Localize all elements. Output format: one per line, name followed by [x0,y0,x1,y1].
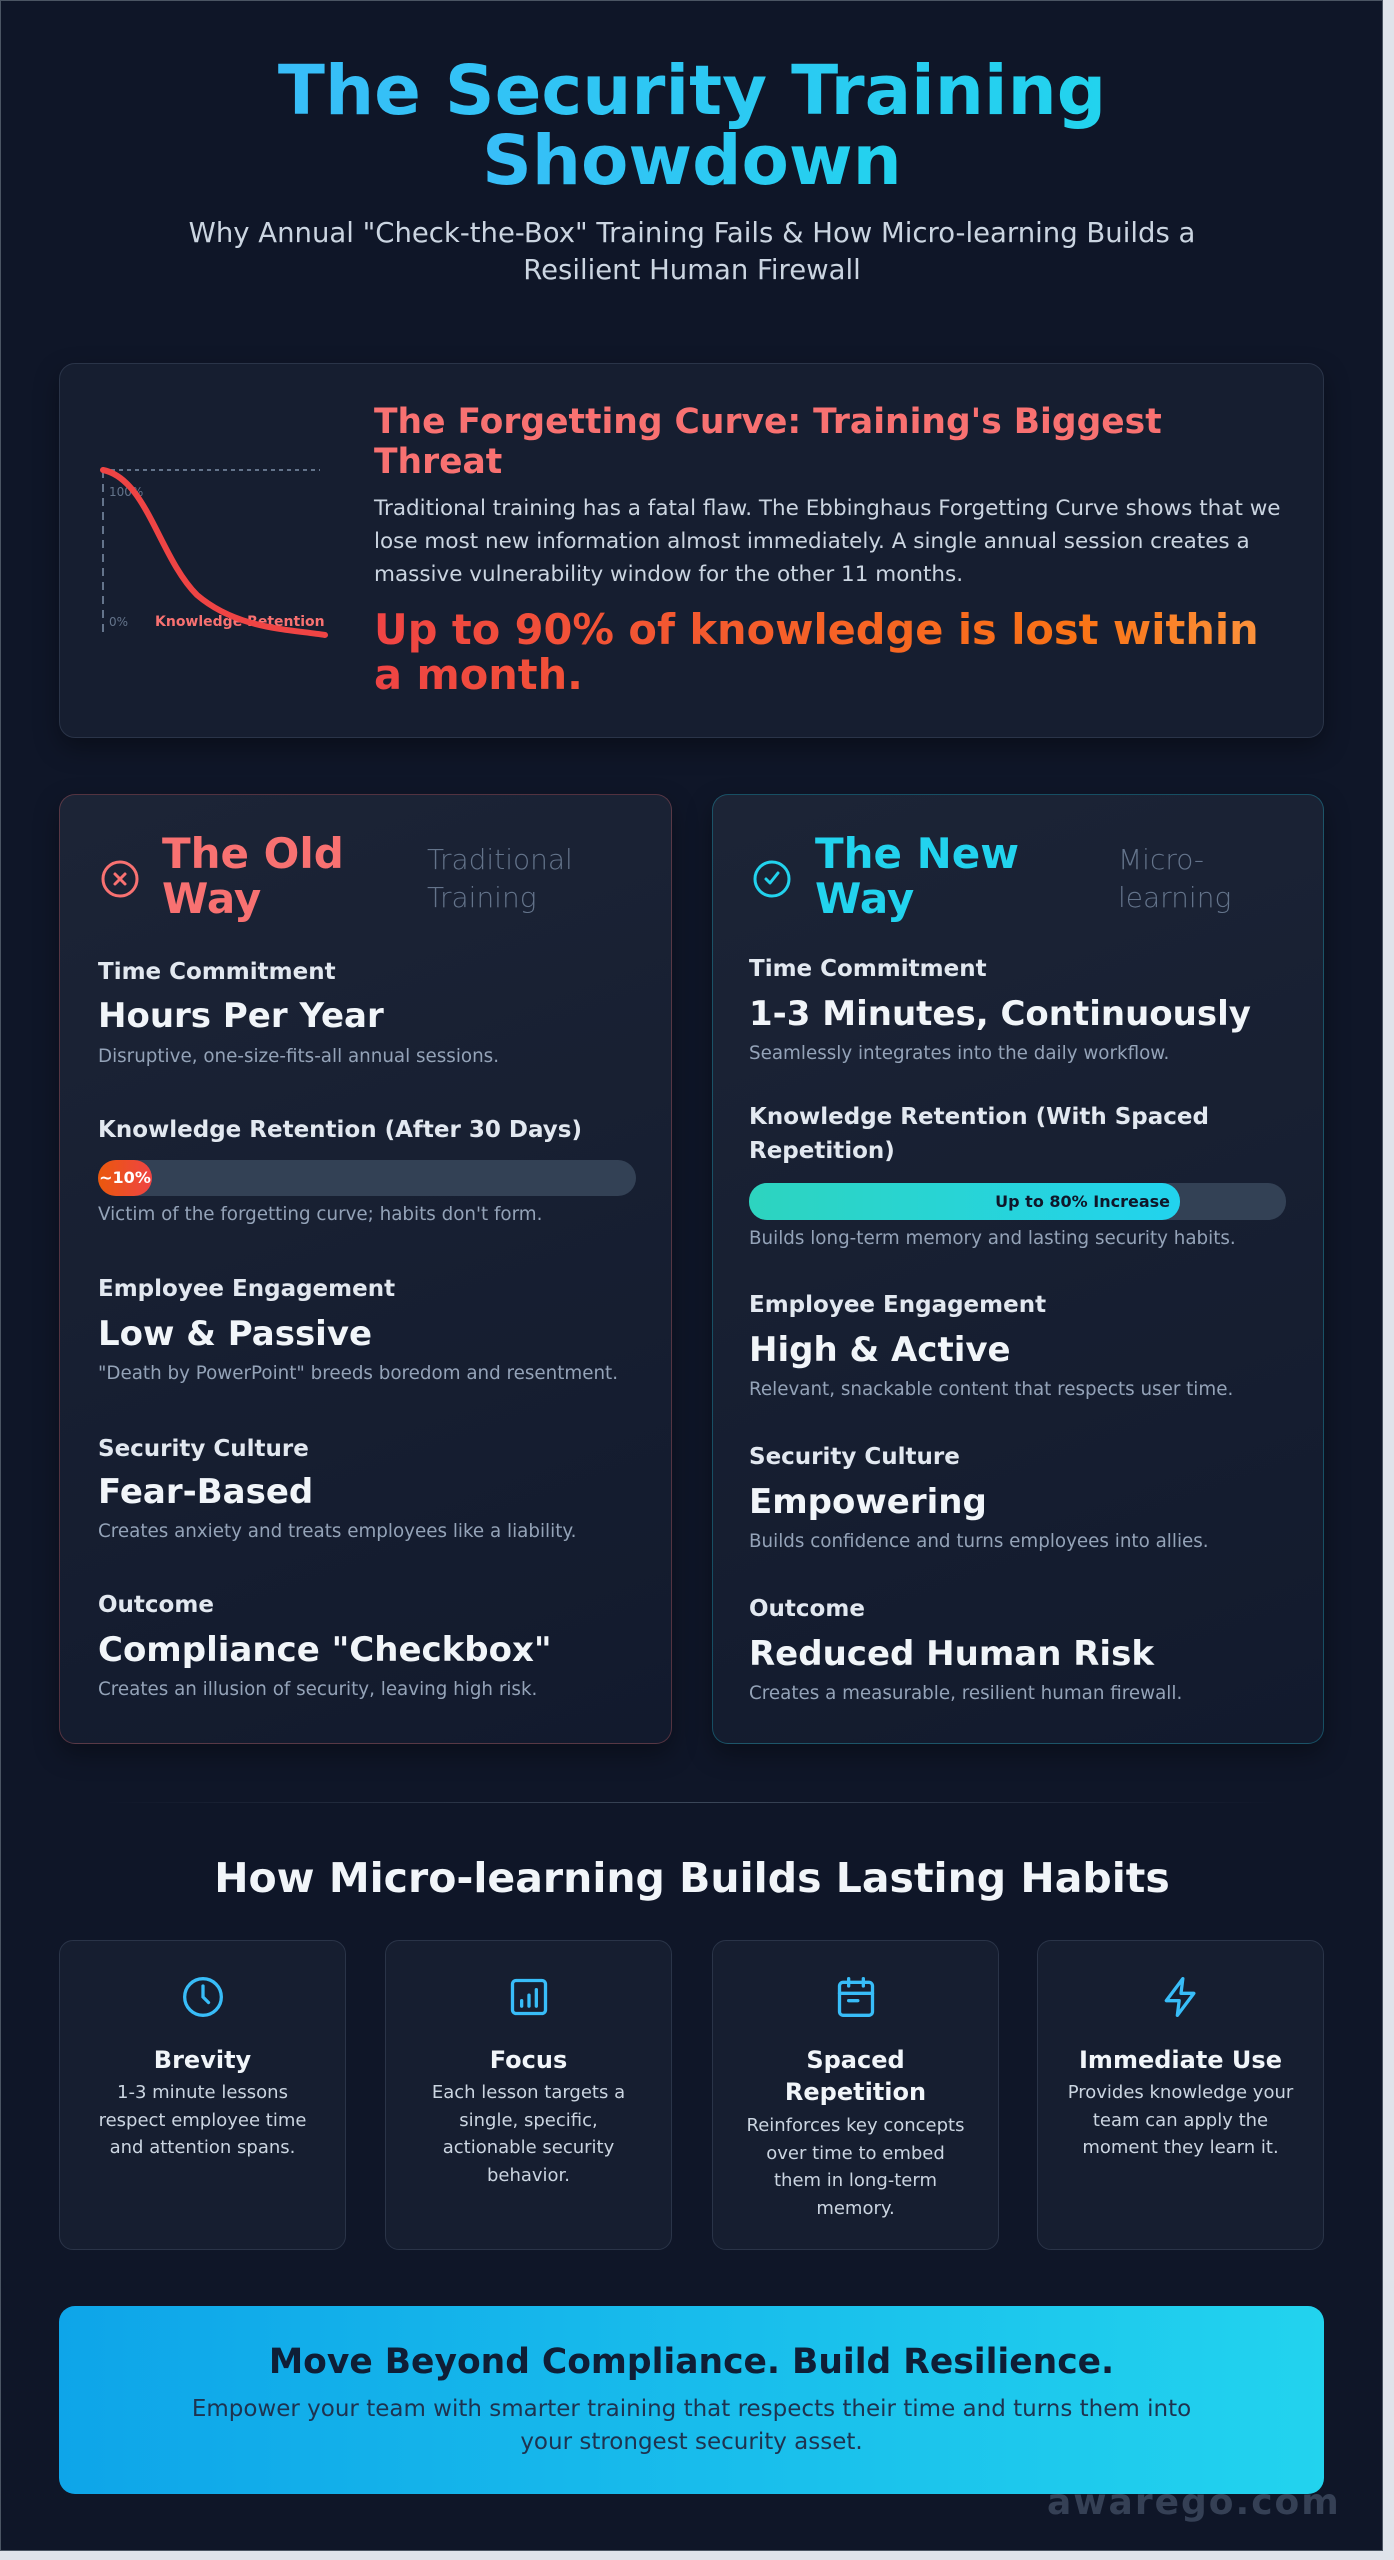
heading: the old way: The Old [162,829,344,878]
row: security culture: Builds confidence and turns employees into allies. [749,1531,1209,1552]
panel: old way [59,794,672,1744]
subtitle: Resilient Human Firewall [523,254,861,286]
card: focus [385,1940,672,2250]
title [278,51,1106,201]
row: knowledge retention [749,1104,1286,1249]
card: focus: Each lesson targets a [432,2082,625,2103]
cta text: Empower your team with smarter training that respects their time and turns them into [192,2396,1191,2422]
chart: forgetting curve: 0% [109,615,128,629]
card: focus: behavior. [487,2164,570,2186]
row: outcome: Creates a measurable, resilient human firewall. [749,1683,1182,1704]
subheading: micro-learning: learning [1118,881,1231,914]
row: time commitment [98,959,499,1067]
bar: 80% increase [749,1183,1286,1220]
card: immediate use: team can apply the [1093,2110,1268,2130]
row: security culture [749,1444,1209,1552]
row: employee engagement [749,1292,1233,1400]
row: knowledge retention: Builds long-term memory and lasting security habits. [749,1228,1236,1249]
title: The Security Training [278,51,1106,131]
bar: ~10% retention: ~10% [99,1168,151,1187]
heading: the old way [162,829,344,923]
card: spaced repetition: memory. [816,2198,895,2218]
heading: micro-learning habits: How Micro-learning Builds Lasting Habits [214,1854,1170,1902]
row: outcome [749,1596,1182,1704]
card: spaced repetition [712,1940,999,2250]
icon: clock [183,1977,223,2017]
card: spaced repetition: over time to embed [766,2142,945,2164]
text: forgetting explanation: Traditional training has a fatal flaw. The Ebbinghaus Forgetting Curve shows that we [374,496,1281,521]
subheading: micro-learning: Micro- [1118,843,1204,876]
row: outcome: Outcome [98,1592,214,1618]
row: outcome: Creates an illusion of security, leaving high risk. [98,1679,537,1700]
card: brevity: 1-3 minute lessons [117,2082,288,2103]
chart: forgetting curve [100,467,328,638]
card: spaced repetition: Spaced [806,2046,905,2074]
row: time commitment: Time Commitment [749,956,987,982]
row: time commitment: Seamlessly integrates into the daily workflow. [749,1043,1169,1064]
heading: the new way: Way [815,874,914,923]
watermark: awarego.com: awarego.com [1047,2482,1341,2523]
row: knowledge retention: Knowledge Retention (After 30 Days) [98,1117,582,1143]
subheading: traditional training [427,843,573,914]
callout: 90% stat: a month. [374,650,583,699]
heading: forgetting curve: Threat [374,442,502,482]
row: outcome [98,1592,552,1700]
icon: check circle [754,860,790,898]
row: security culture: Security Culture [749,1444,960,1470]
subheading: micro-learning [1118,843,1231,914]
card: brevity [59,1940,346,2250]
card: immediate use: Immediate Use [1079,2046,1282,2074]
cta text [192,2396,1191,2455]
row: security culture: Security Culture [98,1436,309,1462]
card: brevity: and attention spans. [110,2137,295,2158]
card: focus: Focus [490,2046,567,2074]
row: knowledge retention [98,1117,636,1225]
callout: call to action [59,2306,1324,2494]
heading: forgetting curve: The Forgetting Curve: Training's Biggest [374,402,1162,442]
callout: 90% stat [374,607,1259,697]
bar: 80% increase: Up to 80% Increase [995,1192,1170,1211]
card: focus: actionable security [443,2137,614,2158]
cta text: your strongest security asset. [520,2429,863,2455]
heading: the new way: The New [815,829,1019,878]
subtitle [189,217,1195,286]
card: focus: single, specific, [459,2110,598,2130]
text: forgetting explanation: massive vulnerability window for the other 11 months. [374,562,963,587]
subheading: traditional training: Training [427,881,537,914]
row: outcome: Compliance "Checkbox" [98,1630,552,1670]
row: employee engagement: Low & Passive [98,1314,372,1354]
row: knowledge retention: Repetition) [749,1138,895,1164]
row: time commitment: Disruptive, one-size-fits-all annual sessions. [98,1046,499,1067]
subtitle: Why Annual "Check-the-Box" Training Fails & How Micro-learning Builds a [189,217,1195,249]
panel: new way [712,794,1324,1744]
row: employee engagement: Employee Engagement [98,1276,395,1302]
card: spaced repetition: Repetition [785,2078,926,2106]
row: knowledge retention: Victim of the forgetting curve; habits don't form. [98,1204,542,1225]
card: spaced repetition: them in long-term [774,2170,937,2191]
heading: forgetting curve [374,402,1162,482]
row: security culture: Empowering [749,1482,987,1522]
cta heading: Move Beyond Compliance. Build Resilience. [269,2342,1114,2382]
title: Showdown [482,121,902,201]
heading: the old way: Way [162,874,261,923]
row: knowledge retention: Knowledge Retention (With Spaced [749,1104,1209,1130]
row: employee engagement: High & Active [749,1330,1011,1370]
callout: 90% stat: Up to 90% of knowledge is lost within [374,605,1259,654]
row: employee engagement: "Death by PowerPoint" breeds boredom and resentment. [98,1363,618,1384]
icon: lightning [1164,1977,1196,2017]
subheading: traditional training: Traditional [427,843,573,876]
text: forgetting explanation [374,496,1281,587]
chart: forgetting curve: 100% [109,485,143,499]
icon: calendar [838,1977,874,2017]
bar: ~10% retention [98,1160,636,1196]
icon: bar chart [510,1978,548,2016]
chart: forgetting curve: Knowledge Retention [155,614,325,630]
row: employee engagement: Employee Engagement [749,1292,1046,1318]
panel: forgetting curve [59,363,1324,738]
row: security culture: Creates anxiety and treats employees like a liability. [98,1521,576,1542]
row: time commitment: 1-3 Minutes, Continuously [749,994,1251,1034]
row: employee engagement: Relevant, snackable content that respects user time. [749,1379,1233,1400]
row: outcome: Reduced Human Risk [749,1634,1154,1674]
row: time commitment: Hours Per Year [98,996,384,1036]
card: immediate use: moment they learn it. [1082,2137,1279,2158]
card: immediate use [1037,1940,1324,2250]
card: immediate use: Provides knowledge your [1068,2082,1293,2103]
icon: x circle [102,860,138,898]
row: time commitment [749,956,1251,1064]
row: security culture: Fear-Based [98,1472,313,1512]
heading: the new way [815,829,1019,923]
row: time commitment: Time Commitment [98,959,336,985]
card: spaced repetition: Reinforces key concepts [746,2115,964,2136]
card: brevity: respect employee time [99,2110,306,2130]
row: security culture [98,1436,576,1542]
card: brevity: Brevity [154,2046,251,2074]
text: forgetting explanation: lose most new information almost immediately. A single annual session creates a [374,529,1250,554]
row: outcome: Outcome [749,1596,865,1622]
row: employee engagement [98,1276,618,1384]
